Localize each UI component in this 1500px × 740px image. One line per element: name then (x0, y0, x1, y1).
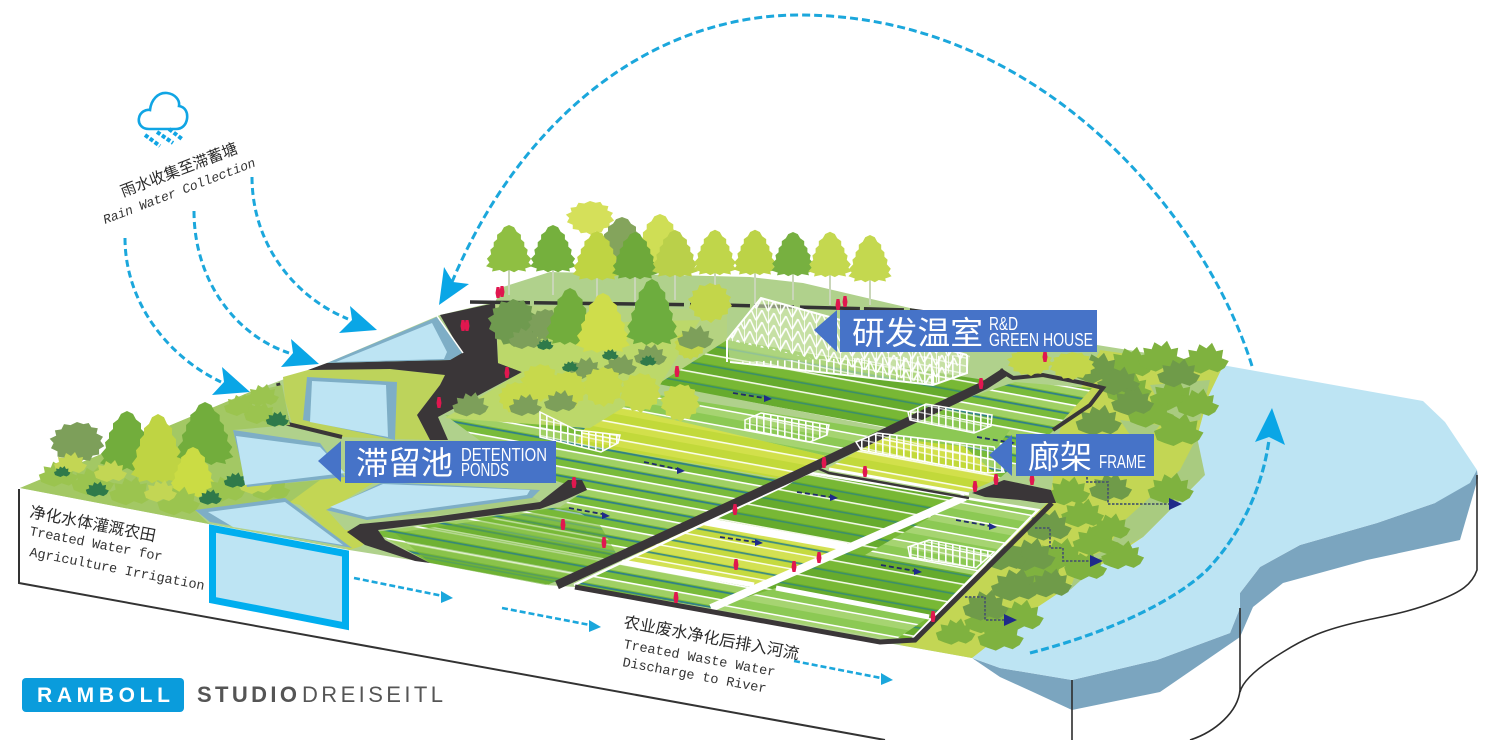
frame: R&D greenhouse (727, 298, 970, 385)
river flow arrow (1030, 408, 1285, 653)
callout: R&D greenhouse: GREEN HOUSE (989, 330, 1093, 350)
site wall outline (19, 489, 885, 740)
main road network (557, 370, 1103, 642)
pond: fourth (326, 482, 540, 520)
rain arrow: middle (194, 211, 319, 367)
frame: long trellis (856, 433, 1004, 473)
text: treated water for irrigation: Treated Water for (28, 525, 163, 566)
wall flow arrow: third (794, 661, 893, 685)
river top surface (972, 365, 1477, 680)
text: rain water collection: Rain Water Collection (101, 156, 258, 228)
wall flow arrow: first (354, 578, 453, 603)
wall flow arrow: second (502, 608, 601, 632)
text: treated water for irrigation: Agriculture Irrigation (28, 546, 206, 595)
pond: fifth (195, 498, 352, 548)
pond: top (327, 316, 463, 363)
text: rain water collection: 雨水收集至滞蓄塘 (117, 137, 241, 202)
rain arrow: left (125, 238, 250, 395)
callout: detention ponds: DETENTION (461, 445, 547, 465)
callout: frame: 廊架 (1028, 432, 1092, 478)
logo: Ramboll (22, 678, 184, 712)
pond terraces and lime planting (240, 369, 542, 550)
field: lime plot (576, 407, 835, 478)
callout: detention ponds: PONDS (461, 460, 509, 480)
text: treated waste water discharge: 农业废水净化后排入河流 (622, 608, 801, 664)
dome recirculation arrow (439, 15, 1252, 366)
logo: Studio Dreiseitl (197, 682, 443, 707)
thin path beside second pond (278, 383, 342, 437)
frame: upper right trellis (908, 404, 992, 433)
callout: detention ponds (318, 438, 556, 484)
upper woodland fill (445, 305, 727, 428)
rain arrow: right (252, 177, 377, 333)
field: research plot by greenhouse (658, 340, 985, 430)
callout: frame: FRAME (1099, 452, 1146, 472)
people figures (436, 286, 1048, 622)
text: treated water for irrigation: 净化水体灌溉农田 (28, 498, 158, 546)
logo: Studio Dreiseitl: STUDIO (197, 682, 297, 707)
callout: detention ponds: 滞留池 (356, 438, 453, 484)
river body (972, 365, 1478, 740)
woodland beside greenhouse (445, 279, 732, 428)
callout: R&D greenhouse: R&D (989, 314, 1018, 334)
text: treated water for irrigation (28, 498, 206, 595)
field: lower left plot (375, 415, 790, 585)
curved road south of ponds (347, 480, 587, 563)
field: top right plot (925, 382, 1092, 478)
field: light plot (619, 392, 890, 458)
callout: R&D greenhouse: 研发温室 (852, 308, 983, 354)
text: treated waste water discharge: Treated Waste Water (622, 638, 776, 681)
logo: Ramboll: RAMBOLL (37, 684, 170, 707)
back hill tree row (486, 201, 892, 310)
speckled trees near road (1007, 348, 1095, 380)
field: frame plot (828, 412, 1000, 492)
site green surface (20, 272, 1222, 658)
callout: R&D greenhouse (814, 308, 1097, 354)
stepped drainage arrows (965, 477, 1182, 626)
frame: left trellis (540, 412, 620, 452)
river base outline (1072, 475, 1477, 740)
frame: central trellis (745, 413, 829, 442)
greenhouse frames (540, 298, 1004, 568)
text: treated waste water discharge: Discharge to River (621, 656, 767, 698)
text: treated waste water discharge (621, 608, 801, 698)
field: lower left darker strip (395, 507, 620, 585)
logo: Studio Dreiseitl: DREISEITL (302, 682, 443, 707)
frame: lower right trellis (908, 540, 994, 568)
field flow arrows (569, 393, 1015, 575)
icon: rain cloud (139, 93, 187, 146)
cutaway reservoir (212, 528, 346, 626)
upper boundary path (470, 302, 1000, 322)
pond: third (233, 430, 345, 487)
field block: south east (574, 473, 1038, 640)
riverside vegetation (900, 341, 1229, 658)
dark road by the ponds (308, 303, 522, 440)
pond: second (303, 377, 397, 440)
callout: frame (989, 432, 1154, 478)
river side wall (972, 470, 1478, 710)
left woodland (20, 384, 320, 524)
